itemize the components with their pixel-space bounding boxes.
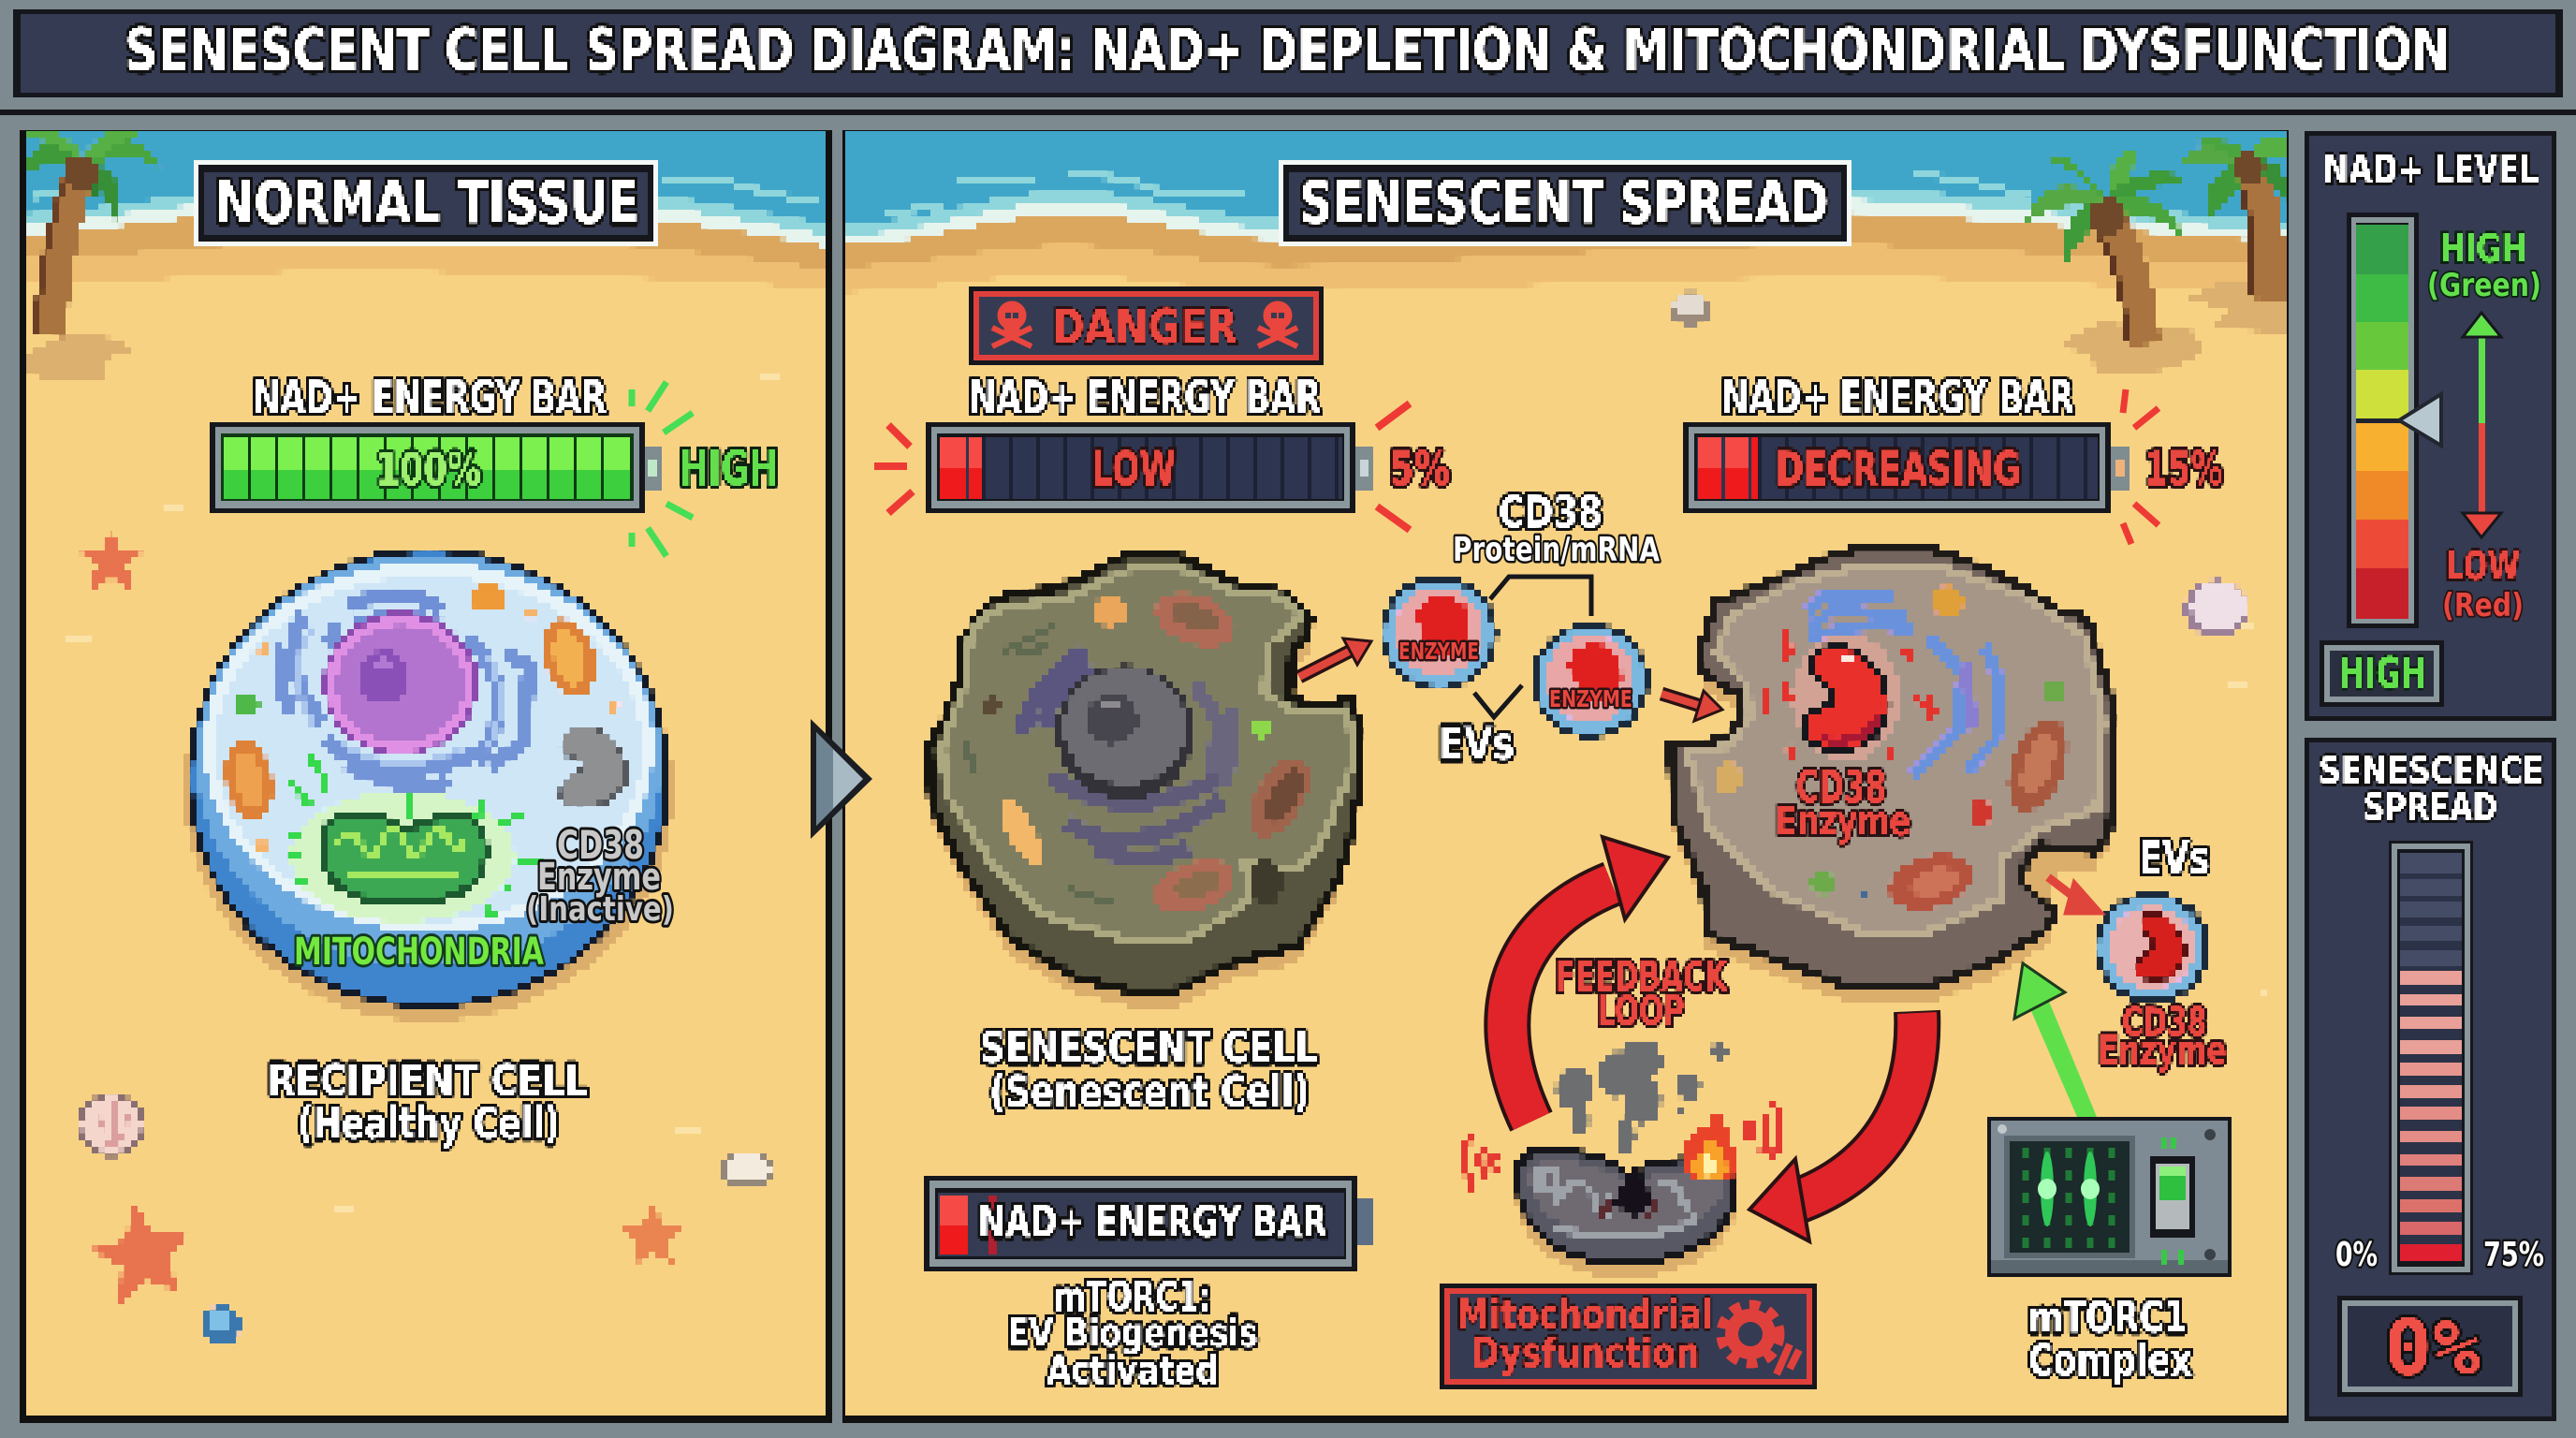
- CD38 enzyme glow: [1792, 634, 1900, 761]
- battery segments: [224, 437, 630, 499]
- shell lilac: [2184, 580, 2249, 638]
- mitochondrion healthy: [290, 791, 515, 922]
- ER blue: [1807, 594, 2000, 777]
- smoke: [1556, 1039, 1728, 1156]
- label CD38 inactive: (Inactive): [526, 890, 674, 929]
- label CD38 enzyme lower: CD38: [2122, 999, 2207, 1045]
- starfish small: [79, 527, 144, 590]
- label CD38 enzyme in cell: Enzyme: [1776, 798, 1910, 845]
- palm tree far right: [2172, 135, 2293, 332]
- caption senescent cell: SENESCENT CELL: [980, 1022, 1317, 1073]
- label feedback loop: FEEDBACK: [1555, 953, 1728, 1001]
- caption mTORC1 complex: Complex: [2028, 1335, 2192, 1386]
- double arrow: [2463, 313, 2501, 537]
- label CD38 inactive: Enzyme: [537, 856, 661, 899]
- spread gauge: [2389, 841, 2473, 1275]
- skull eyes: [1005, 313, 1284, 318]
- panel: normal tissue beach background: [17, 127, 827, 1418]
- palm tree left: [17, 127, 164, 381]
- starfish large: [92, 1206, 190, 1304]
- caption mTORC1 complex: [2028, 1292, 2192, 1386]
- battery text: NAD+ ENERGY BAR: [978, 1196, 1327, 1247]
- arrow: cell to lower EV: [2048, 877, 2097, 911]
- legend low word: LOW: [2446, 543, 2520, 589]
- CD38 inactive enzyme: [562, 726, 626, 807]
- enzyme tags: ENZYME: [1398, 638, 1479, 665]
- label box: normal tissue: [194, 160, 658, 246]
- battery: healthy 100%: [210, 422, 662, 513]
- screen dots: [2026, 1148, 2112, 1250]
- legend green word: (Green): [2427, 267, 2541, 304]
- label CD38 inactive: CD38: [557, 822, 644, 868]
- value LOW: LOW: [1092, 442, 1176, 496]
- EV bubble right: [1531, 623, 1649, 739]
- caption recipient cell: RECIPIENT CELL: [268, 1055, 588, 1106]
- caption recipient cell: [268, 1055, 588, 1149]
- panel: senescent spread beach background: [847, 134, 2293, 1418]
- value 5%: 5%: [1389, 442, 1450, 496]
- senescent nucleus: [1056, 665, 1194, 800]
- label CD38 enzyme lower: [2099, 999, 2227, 1073]
- arrow: normal to senescent: [811, 719, 872, 839]
- heading: normal tissue: NORMAL TISSUE: [215, 169, 639, 237]
- spreading senescent cell: [1671, 550, 2115, 1003]
- broken mitochondrion: [1515, 1144, 1739, 1278]
- gauge label 0%: 0%: [2335, 1236, 2378, 1274]
- caption mTORC1: Activated: [1046, 1347, 1219, 1393]
- sparks red decreasing: [2123, 389, 2159, 544]
- spread value: 0%: [2384, 1304, 2481, 1393]
- caption mTORC1 complex: mTORC1: [2028, 1292, 2187, 1343]
- label CD38 title: CD38: [1499, 487, 1603, 537]
- value box text HIGH: HIGH: [2339, 648, 2426, 698]
- red stress marks: [1766, 629, 1936, 763]
- organelles orange: [219, 583, 620, 854]
- enzyme tags: ENZYME: [1549, 685, 1632, 712]
- empty segments: [2400, 853, 2462, 966]
- sparks green: [632, 382, 693, 556]
- label EVs: EVs: [1439, 718, 1515, 770]
- arrow: EV into cell: [1661, 691, 1722, 721]
- mTORC1 control panel: [1987, 1117, 2232, 1277]
- healthy cell: [183, 548, 674, 1021]
- sidebar heading senescence spread: [2319, 750, 2543, 829]
- mitochondrial dysfunction text: [1456, 1291, 1713, 1377]
- sidebar heading senescence spread: SPREAD: [2364, 786, 2497, 829]
- pebble: [1670, 291, 1711, 327]
- level gauge: [2347, 213, 2419, 628]
- vibration marks: [1465, 1101, 1779, 1191]
- label EVs lower: EVs: [2139, 832, 2210, 885]
- current value box: [2320, 640, 2444, 707]
- sand flecks: [66, 373, 780, 1212]
- danger sign: [969, 286, 1324, 365]
- arrow: senescent cell to EV: [1299, 638, 1371, 677]
- skull right: [1258, 301, 1297, 346]
- pebble blue: [202, 1305, 242, 1344]
- palm tree centre right: [2024, 148, 2204, 374]
- label CD38 enzyme lower: Enzyme: [2099, 1027, 2227, 1073]
- connector: EVs ticks: [1474, 685, 1522, 717]
- caption mTORC1: [1007, 1273, 1258, 1393]
- caption senescent cell: (Senescent Cell): [989, 1066, 1310, 1117]
- sand flecks: [2228, 625, 2268, 999]
- value HIGH: HIGH: [680, 441, 778, 497]
- legend high word: HIGH: [2439, 226, 2526, 271]
- label CD38 inactive: [526, 822, 674, 929]
- sparks red low: [874, 404, 1410, 530]
- senescent cell: [929, 554, 1362, 1007]
- skull left: [992, 301, 1032, 346]
- battery: senescent low: [926, 422, 1373, 513]
- energy bar label low: NAD+ ENERGY BAR: [969, 372, 1321, 424]
- title bar: [13, 9, 2563, 97]
- EV bubble left: [1380, 575, 1498, 691]
- feedback arrow left: [1507, 837, 1668, 1122]
- label CD38 enzyme in cell: [1776, 761, 1910, 845]
- label CD38 enzyme in cell: CD38: [1796, 761, 1886, 814]
- shell white: [721, 1153, 773, 1186]
- enzyme tags: [1398, 638, 1632, 712]
- mitochondrial dysfunction box: [1440, 1284, 1817, 1389]
- organelles: [1714, 586, 2079, 918]
- arrow: mTORC1 green: [2014, 963, 2097, 1118]
- label MITOCHONDRIA: MITOCHONDRIA: [294, 931, 544, 974]
- switch: [2150, 1156, 2195, 1238]
- filled segments: [2400, 971, 2462, 1261]
- mitochondrial dysfunction text: Dysfunction: [1471, 1329, 1700, 1377]
- label box: senescent spread: [1279, 160, 1852, 246]
- label CD38 protein: Protein/mRNA: [1453, 531, 1660, 569]
- caption recipient cell: (Healthy Cell): [298, 1098, 560, 1149]
- senescent organelles: [964, 583, 1322, 923]
- connector: CD38 label to bubbles: [1490, 577, 1591, 616]
- flame: [1683, 1102, 1738, 1181]
- mitochondrion sparks: [285, 754, 541, 917]
- caption mTORC1: mTORC1:: [1054, 1273, 1211, 1321]
- legend red word: (Red): [2442, 587, 2524, 624]
- caption mTORC1: EV Biogenesis: [1007, 1310, 1258, 1356]
- panel: senescence spread gauge: [2305, 738, 2556, 1421]
- senescent ER: [1022, 651, 1234, 858]
- endoplasmic reticulum: [280, 594, 529, 786]
- value DECREASING: DECREASING: [1776, 442, 2021, 496]
- percent box: [2337, 1296, 2523, 1397]
- starfish right: [622, 1206, 681, 1265]
- shell pink: [77, 1093, 146, 1157]
- panel: NAD+ level gauge: [2305, 131, 2556, 721]
- label feedback loop: [1555, 953, 1728, 1035]
- danger text: DANGER: [1052, 300, 1237, 356]
- mitochondrial dysfunction text: Mitochondrial: [1456, 1291, 1713, 1339]
- battery: mTORC1 nearly empty: [924, 1176, 1373, 1271]
- caption senescent cell: [980, 1022, 1317, 1117]
- energy bar label healthy: NAD+ ENERGY BAR: [253, 372, 607, 424]
- label feedback loop: LOOP: [1597, 988, 1685, 1035]
- value 100%: 100%: [376, 444, 481, 496]
- energy bar label decreasing: NAD+ ENERGY BAR: [1721, 372, 2074, 424]
- EV bubble lower: [2094, 891, 2210, 1004]
- nucleus: [323, 611, 478, 756]
- heading: senescent spread: SENESCENT SPREAD: [1299, 169, 1829, 237]
- feedback arrow right: [1749, 1011, 1917, 1241]
- battery: decreasing: [1683, 422, 2130, 513]
- gauge label 75%: 75%: [2483, 1236, 2544, 1274]
- gear icon: [1722, 1306, 1799, 1374]
- level pointer: [2399, 394, 2441, 446]
- value 15%: 15%: [2145, 442, 2223, 496]
- CD38 active enzyme: [1804, 646, 1888, 751]
